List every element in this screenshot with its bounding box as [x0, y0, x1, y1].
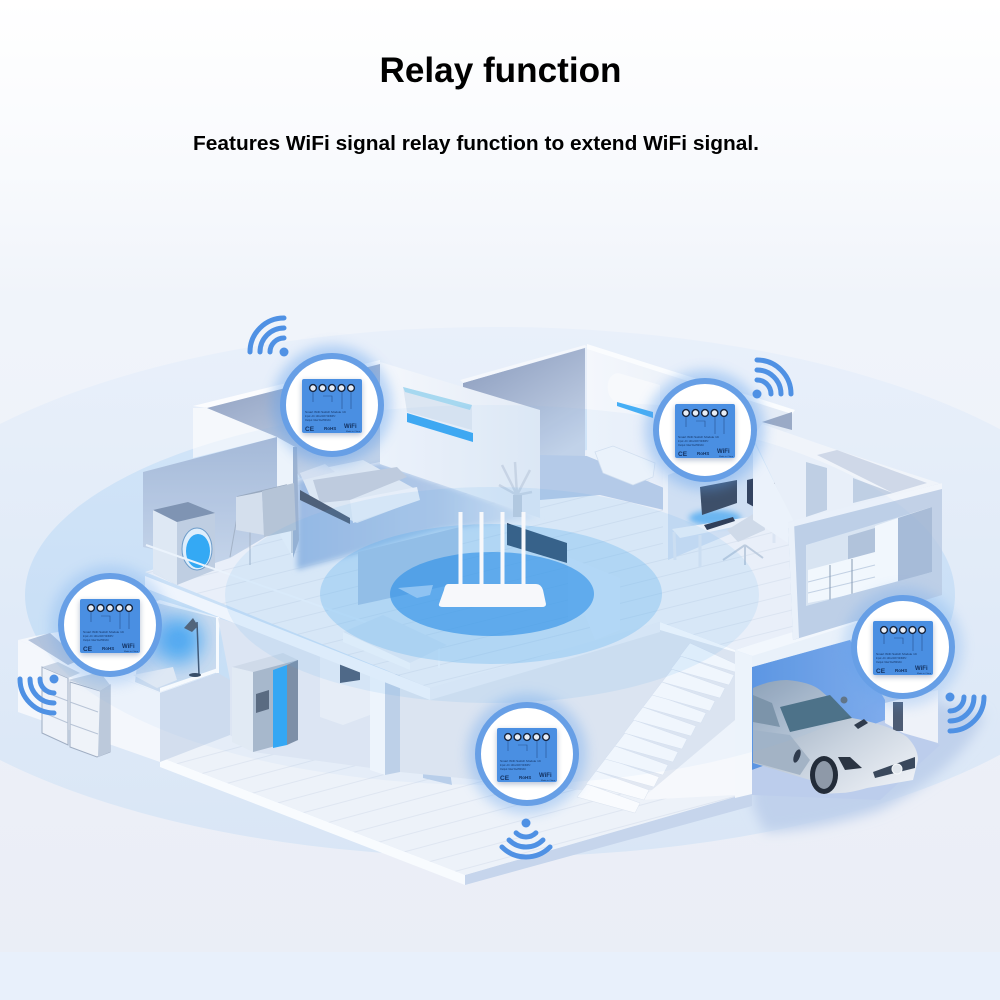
module callout: kitchen: Output: Max 5A/250VAC [83, 639, 109, 642]
white stair side wedge [640, 720, 735, 800]
module callout: kitchen: RoHS [102, 646, 114, 651]
module callout: garage: WiFi [915, 666, 928, 672]
stairs back wall [400, 622, 735, 790]
sofa [343, 615, 447, 663]
module callout: garage: Made in China [917, 673, 932, 675]
blue ground shadow near garage [752, 690, 985, 832]
laundry room wall [143, 437, 299, 563]
sofa base [343, 632, 410, 670]
antennas [458, 512, 526, 584]
title: Relay function [380, 51, 622, 90]
car [753, 680, 918, 794]
module callout: study: Made in China [719, 456, 734, 458]
upper floor slab [145, 445, 795, 700]
right partition [568, 557, 620, 640]
lamp and laundry on side room [133, 618, 201, 688]
module callout: dining: RoHS [519, 775, 531, 780]
module callout: study: RoHS [697, 451, 709, 456]
module callout: dining: Output: Max 5A/250VAC [500, 768, 526, 771]
outer coverage ellipse on ground [0, 327, 1000, 857]
module callout: garage: RoHS [895, 668, 907, 673]
ring 5 overlay [390, 552, 594, 636]
washing machine [153, 502, 215, 585]
module callout: bedroom: RoHS [324, 426, 336, 431]
right wall and storage [753, 424, 942, 640]
module callout: study: Input: AC 100-240V 50/60Hz [678, 440, 709, 443]
living room [343, 523, 620, 670]
module callout: garage: Output: Max 5A/250VAC [876, 661, 902, 664]
bathtub [595, 446, 655, 485]
icon: wifi top-right [752, 360, 791, 398]
module callout: kitchen: Made in China [124, 651, 139, 653]
module callout: kitchen [50, 565, 170, 685]
module callout: bedroom: Smart WiFi Switch Module 1C [305, 410, 347, 414]
plant [499, 462, 532, 517]
white pillar [735, 616, 860, 798]
ring 3 overlay [225, 487, 759, 703]
ring 4 overlay [320, 524, 662, 664]
module callout: dining: Made in China [541, 780, 556, 782]
module callout: garage [843, 587, 963, 707]
module callout: kitchen: Smart WiFi Switch Module 1C [83, 630, 125, 634]
module callout: bedroom: CE [305, 426, 315, 433]
ring 2 overlay [25, 405, 955, 785]
bathroom back wall [463, 348, 585, 470]
router body [439, 584, 546, 607]
central pillar [370, 672, 400, 775]
icon: wifi top-left [250, 318, 288, 356]
module callout: dining: WiFi [539, 773, 552, 779]
module callout: kitchen: CE [83, 646, 93, 653]
module callout: study: Smart WiFi Switch Module 1C [678, 435, 720, 439]
bathroom right wall [587, 344, 795, 486]
module callout: study: Output: Max 5A/250VAC [678, 444, 704, 447]
clothes rack [230, 483, 296, 565]
lower floor slab [160, 650, 752, 885]
icon: wifi left [20, 674, 58, 713]
bathroom floor [540, 455, 664, 510]
bed [300, 460, 420, 524]
module callout: garage: Smart WiFi Switch Module 1C [876, 652, 918, 656]
module callout: study: CE [678, 451, 688, 458]
bedroom walls [193, 345, 587, 570]
lower left wall and side room [18, 600, 230, 762]
refrigerator [232, 653, 298, 752]
railing [146, 545, 439, 668]
cabinets behind [320, 653, 370, 725]
module callout: dining [467, 694, 587, 814]
module callout: dining: Smart WiFi Switch Module 1C [500, 759, 542, 763]
module callout: garage: Input: AC 100-240V 50/60Hz [876, 657, 907, 660]
living wall [358, 527, 460, 605]
module callout: bedroom: Input: AC 100-240V 50/60Hz [305, 415, 336, 418]
TV [507, 523, 567, 563]
icon: wifi right [946, 692, 984, 731]
study area [663, 442, 782, 567]
air conditioner [403, 387, 473, 442]
dressers [42, 662, 110, 757]
subtitle: Features WiFi signal relay function to extend WiFi signal. [193, 133, 759, 155]
house model [18, 344, 942, 885]
module callout: kitchen: WiFi [122, 644, 135, 650]
module callout: dining: CE [500, 775, 510, 782]
icon: wifi bottom [499, 817, 553, 871]
signal rings over house [25, 405, 955, 785]
lower back wall [218, 618, 400, 772]
module callout: bedroom: WiFi [344, 424, 357, 430]
module callout: study: WiFi [717, 449, 730, 455]
module callout: study [645, 370, 765, 490]
module callout: bedroom: Made in China [346, 431, 361, 433]
garage interior [752, 622, 940, 800]
stairs [577, 643, 738, 813]
module callout: kitchen: Input: AC 100-240V 50/60Hz [83, 635, 114, 638]
water heater [608, 373, 660, 418]
module callout: bedroom [272, 345, 392, 465]
module callout: dining: Input: AC 100-240V 50/60Hz [500, 764, 531, 767]
module callout: garage: CE [876, 668, 886, 675]
second coverage ellipse on ground [25, 405, 955, 785]
router [439, 512, 546, 607]
coffee table [398, 585, 433, 598]
bottom band [0, 952, 1000, 1000]
dining set [423, 723, 483, 785]
module callout: bedroom: Output: Max 5A/250VAC [305, 419, 331, 422]
